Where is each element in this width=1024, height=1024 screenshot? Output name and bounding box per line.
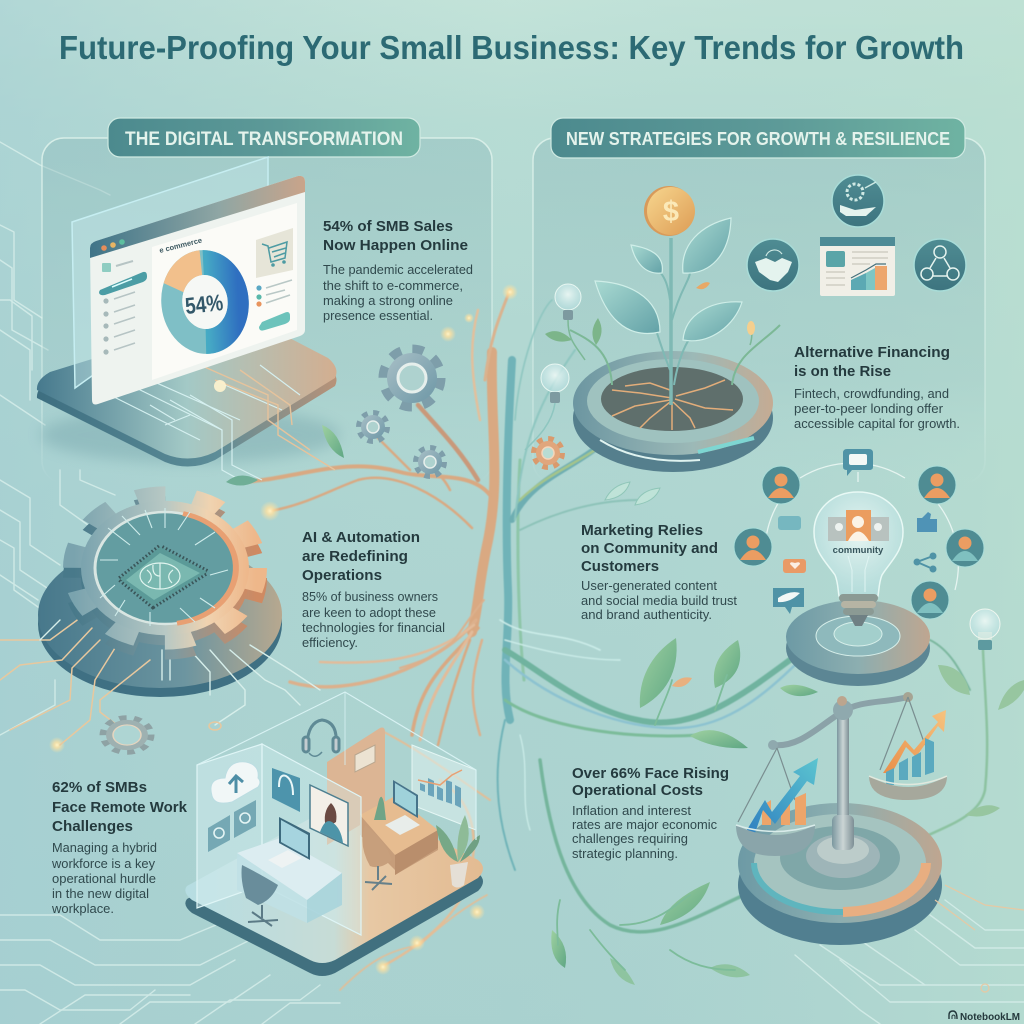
- illustration: community bulb: [734, 449, 984, 686]
- branch stems: [655, 272, 690, 385]
- text: marketing community: Customers: [581, 559, 659, 575]
- coin: [644, 186, 695, 236]
- vine leaves: branch centre: [605, 482, 660, 505]
- bulb filament: [848, 556, 869, 592]
- stem: [669, 238, 673, 405]
- icon: shopping cart: [256, 228, 293, 278]
- node rings: [209, 722, 221, 730]
- list bullets: [256, 280, 292, 307]
- text: remote work: Challenges: [52, 819, 133, 835]
- text: marketing community: [581, 523, 738, 622]
- illustration: balance scale: [736, 692, 1024, 992]
- text: remote work: Managing a hybrid: [52, 841, 157, 855]
- scale post: [837, 705, 849, 830]
- AI chip: [120, 547, 207, 606]
- tree: tan trunk and branches: [235, 290, 510, 990]
- disc circuit traces: [0, 618, 150, 745]
- text: remote work: operational hurdle: [52, 872, 156, 886]
- base plate: [786, 600, 930, 686]
- scale base: [738, 803, 942, 945]
- sidebar: [99, 261, 147, 355]
- wall note: [355, 745, 375, 772]
- illustration: money plant: [525, 186, 780, 472]
- heading banner: new strategies: NEW STRATEGIES FOR GROWTH & RESILIENCE: [566, 128, 950, 149]
- text: remote work: Face Remote Work: [52, 800, 188, 816]
- social icons: [773, 449, 937, 614]
- soil roots: [612, 380, 733, 430]
- text: AI and automation: are keen to adopt these: [302, 606, 436, 620]
- coin: $: [663, 196, 679, 228]
- laptop platform: [37, 316, 340, 480]
- connector lines: [765, 463, 958, 590]
- text: alternative financing: Alternative Financing: [794, 345, 950, 361]
- people icons in bulb: [828, 510, 889, 541]
- text: alternative financing: Fintech, crowdfunding, and: [794, 387, 949, 401]
- tan desk monitor: [393, 780, 418, 818]
- icon: small bulb right: [970, 609, 1000, 650]
- text: 54% of SMB sales: Now Happen Online: [323, 238, 468, 254]
- heading banner: new strategies: [551, 118, 965, 158]
- text: operational costs: Operational Costs: [572, 783, 703, 799]
- disc: [38, 551, 282, 697]
- panel: the digital transformation: [42, 118, 492, 483]
- text: 54% of SMB sales: The pandemic accelerated: [323, 263, 473, 277]
- community label: community: [833, 545, 884, 556]
- green sprouts: [545, 318, 780, 385]
- heading banner: the digital transformation: [108, 118, 420, 157]
- tan desk: [360, 780, 438, 875]
- text: marketing community: Marketing Relies: [581, 523, 703, 539]
- text: 54% of SMB sales: making a strong online: [323, 294, 453, 308]
- headset tile: [272, 768, 300, 812]
- text: alternative financing: accessible capital for growth.: [794, 417, 960, 431]
- text: remote work: [51, 780, 188, 916]
- icon: tree gear orange: [534, 439, 562, 467]
- donut chart 54%: [165, 256, 245, 348]
- icon: hand with gear: [832, 175, 884, 227]
- panel: new strategies: [533, 118, 985, 483]
- tree: teal and green trunk with vines: [498, 300, 987, 932]
- text: alternative financing: is on the Rise: [794, 364, 891, 380]
- small bulbs: [525, 284, 585, 450]
- text: remote work: workplace.: [51, 902, 114, 916]
- text: AI and automation: technologies for financial: [302, 621, 445, 635]
- brain icon: [140, 563, 180, 589]
- text: operational costs: [572, 766, 729, 861]
- text: AI and automation: are Redefining: [302, 549, 408, 565]
- text: AI and automation: AI & Automation: [302, 530, 420, 546]
- potted plant: [436, 815, 480, 888]
- bulb base screw: [839, 594, 878, 626]
- illustration: e-commerce laptop: [37, 157, 340, 480]
- text: marketing community: on Community and: [581, 541, 718, 557]
- icon: tree gear small: [416, 448, 444, 476]
- glow dots: [49, 284, 518, 975]
- avatars: [734, 466, 984, 619]
- text: 54% of SMB sales: 54% of SMB Sales: [323, 219, 453, 235]
- planter ring: [573, 351, 773, 472]
- bulb glass: [814, 492, 903, 596]
- text: AI and automation: 85% of business owners: [302, 590, 438, 604]
- text: marketing community: and brand authenticity.: [581, 608, 712, 622]
- text: remote work: 62% of SMBs: [52, 780, 147, 796]
- tan partition wall: [327, 728, 385, 845]
- tan desk chair: [362, 825, 392, 890]
- illustration: AI gear on disc: [0, 495, 320, 745]
- small plant on desk: [374, 797, 386, 820]
- text: alternative financing: [794, 345, 960, 431]
- blue desk chair: [242, 865, 278, 926]
- text: marketing community: and social media build trust: [581, 594, 738, 608]
- left pan with blue arrow: [736, 748, 818, 856]
- office floor: [185, 800, 483, 976]
- text: AI and automation: efficiency.: [302, 636, 358, 650]
- support tiles: [208, 800, 256, 852]
- icon: tree gear medium: [359, 413, 387, 441]
- watermark: NotebookLM: NotebookLM: [960, 1011, 1020, 1023]
- cloud upload icon: [211, 762, 260, 803]
- text: 54% of SMB sales: the shift to e-commerce,: [323, 279, 463, 293]
- icon: tree gear large: [383, 349, 441, 407]
- glass back screen: [72, 157, 268, 388]
- gear body: [74, 505, 256, 651]
- plant leaves: [595, 218, 742, 341]
- title: Future-Proofing Your Small Business: Key Trends for Growth: [59, 29, 964, 66]
- scale circuit lines: [935, 885, 1024, 992]
- video call card: [310, 785, 348, 846]
- vine branches lower: [557, 675, 735, 970]
- glass room panels: [197, 692, 476, 935]
- text: 54% of SMB sales: presence essential.: [323, 309, 433, 323]
- icon: small grey gear: [103, 718, 151, 752]
- text: marketing community: User-generated content: [581, 579, 718, 593]
- text: AI and automation: Operations: [302, 568, 382, 584]
- text: remote work: in the new digital: [52, 887, 149, 901]
- text: remote work: workforce is a key: [51, 857, 156, 871]
- text: 54% of SMB sales: [323, 219, 473, 323]
- icon: handshake: [747, 239, 799, 291]
- headset icon floating: [303, 720, 339, 756]
- gear circuit pattern: [100, 508, 228, 626]
- e-commerce label: e commerce: [158, 236, 203, 255]
- vine leaves: centre right: [551, 638, 1024, 985]
- browser window: [90, 176, 305, 404]
- scale beam: [768, 692, 913, 750]
- card: report: [820, 237, 895, 296]
- text: operational costs: Inflation and interest: [572, 804, 692, 818]
- icon: network people: [914, 239, 966, 291]
- content card: [152, 203, 297, 380]
- illustration: remote office: [185, 692, 483, 976]
- glass wall with chart: [412, 745, 476, 830]
- blue desk monitor: [279, 817, 310, 860]
- text: operational costs: rates are major economic: [572, 818, 717, 832]
- text: operational costs: challenges requiring: [572, 832, 688, 846]
- text: operational costs: Over 66% Face Rising: [572, 766, 729, 782]
- text: alternative financing: peer-to-peer londing offer: [794, 402, 943, 416]
- small leaf orange: [696, 282, 710, 289]
- text: AI and automation: [302, 530, 445, 650]
- tree leaves: left: [226, 425, 344, 486]
- blue desk: [237, 817, 342, 923]
- button: [259, 312, 290, 331]
- heading banner: the digital transformation: THE DIGITAL TRANSFORMATION: [125, 129, 403, 150]
- donut value: 54%: [184, 289, 224, 319]
- text: operational costs: strategic planning.: [572, 847, 678, 861]
- right pan with orange arrow: [869, 697, 947, 800]
